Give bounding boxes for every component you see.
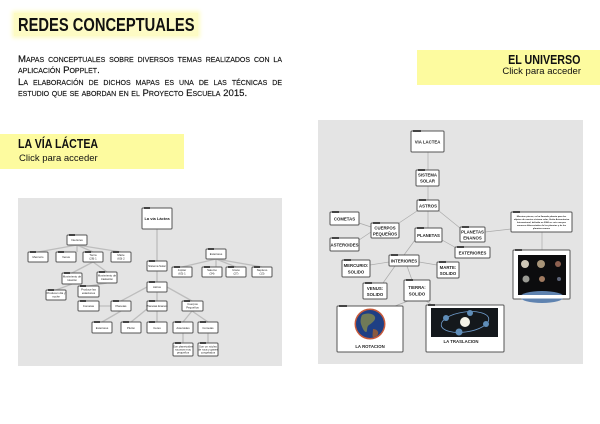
panel: mapa La Vía Láctea: noche	[52, 294, 60, 298]
node: Exteriores	[455, 246, 490, 258]
panel: mapa La Vía Láctea: Son un núcleo	[199, 344, 217, 348]
node: Mercurio	[342, 259, 370, 277]
panel: mapa La Vía Láctea: traslación	[101, 277, 113, 281]
panel: mapa La Vía Láctea: Neptuno	[257, 268, 268, 272]
node: Asteroides	[330, 237, 359, 251]
card: La rotación: LA ROTACION	[355, 344, 385, 349]
banner: La Vía Láctea: LA VÍA LÁCTEA	[18, 137, 98, 151]
node: Sistema Solar: SISTEMA	[418, 172, 437, 178]
panel: mapa La Vía Láctea	[18, 198, 282, 366]
card: planetas enanos imagen	[513, 249, 570, 303]
node: Venus	[363, 282, 387, 299]
node: descripción planetas enanos: planetas enanos	[533, 227, 551, 230]
panel: mapa La Vía Láctea: Son planetoides	[173, 344, 194, 348]
node: Cuerpos pequeños: PEQUEÑOS	[373, 232, 397, 236]
node: Planetas enanos: ENANOS	[463, 236, 482, 240]
node: descripción planetas enanos: objetos de nuestro sistema solar, Unión Astronómica	[514, 218, 570, 221]
panel: mapa El Universo	[318, 120, 583, 364]
intro text: aplicación Popplet.	[18, 64, 100, 76]
node: Marte: SOLIDO	[440, 271, 457, 276]
panel: mapa La Vía Láctea: estaciones	[82, 291, 96, 295]
panel: mapa La Vía Láctea: Venus	[62, 255, 70, 259]
panel: mapa La Vía Láctea: Exteriores	[96, 326, 109, 330]
node: descripción planetas enanos: Internacional, definida en 2006 en seis cuerpos	[517, 221, 567, 224]
panel: mapa La Vía Láctea: Júpiter	[178, 268, 186, 272]
node: Cometas: COMETAS	[334, 216, 355, 222]
panel: mapa La Vía Láctea: Plutón	[127, 326, 135, 330]
node: Exteriores: EXTERIORES	[459, 250, 486, 256]
panel: mapa La Vía Láctea: Interiores	[71, 238, 83, 242]
panel: mapa La Vía Láctea: Producen día y	[47, 291, 66, 295]
card: La traslación	[426, 304, 504, 352]
panel: mapa La Vía Láctea: Ceres	[153, 326, 161, 330]
node: Mercurio: SOLIDO	[348, 270, 365, 274]
node: Vía Láctea: VIA LACTEA	[415, 140, 440, 144]
node: Cuerpos pequeños: CUERPOS	[374, 226, 396, 230]
node: descripción planetas enanos	[511, 211, 572, 232]
node: Sistema Solar: SOLAR	[420, 178, 436, 184]
node: Vía Láctea	[411, 130, 444, 152]
intro text: La elaboración de dichos mapas es una de las técnicas de	[18, 76, 282, 88]
panel: mapa La Vía Láctea: pequeños	[177, 350, 190, 354]
panel: mapa La Vía Láctea: (34)	[210, 272, 215, 276]
node: Tierra: TIERRA:	[408, 285, 426, 290]
panel: mapa La Vía Láctea: Astros	[153, 285, 162, 289]
panel: mapa La Vía Láctea: Pequeños	[186, 306, 199, 310]
panel: mapa La Vía Láctea: (63) 1	[178, 272, 186, 276]
intro text	[18, 54, 282, 98]
panel: mapa La Vía Láctea: Tierra	[89, 253, 97, 257]
node: Tierra	[404, 279, 430, 301]
node: Interiores	[389, 254, 419, 266]
card: La traslación: LA TRASLACION	[444, 339, 478, 344]
node: Asteroides: ASTEROIDES	[331, 242, 359, 248]
panel: mapa La Vía Láctea: congelados	[201, 350, 216, 354]
panel: mapa La Vía Láctea: de roca y gases	[198, 348, 218, 352]
banner: La Vía Láctea: Click para acceder	[19, 153, 98, 164]
panel: mapa La Vía Láctea: rocosos muy	[175, 348, 192, 352]
panel: mapa La Vía Láctea: Movimiento de	[63, 274, 82, 278]
panel: mapa La Vía Láctea: Saturno	[207, 268, 217, 272]
panel: mapa La Vía Láctea: Produce las	[81, 288, 96, 292]
intro text: Mapas conceptuales sobre diversos temas realizados con la	[18, 54, 282, 64]
panel: mapa La Vía Láctea: Marte	[117, 253, 125, 257]
panel: mapa La Vía Láctea: Cuerpos	[187, 302, 198, 306]
node: Astros	[417, 199, 439, 211]
banner: El Universo: EL UNIVERSO	[509, 53, 581, 67]
banner: La Vía Láctea	[0, 134, 184, 169]
panel: mapa La Vía Láctea: Planetas	[116, 304, 127, 308]
node: Interiores: INTERIORES	[391, 258, 417, 264]
panel: mapa La Vía Láctea: La vía Láctea	[144, 216, 170, 221]
panel: mapa La Vía Láctea: Asteroides	[176, 326, 190, 330]
panel: mapa La Vía Láctea: (27)	[234, 272, 239, 276]
node: Planetas	[415, 227, 442, 242]
node: Venus: SOLIDO	[367, 292, 384, 297]
panel: mapa La Vía Láctea: (60) 2	[117, 256, 125, 260]
panel: mapa La Vía Láctea: Cometas	[83, 304, 95, 308]
panel: mapa La Vía Láctea: Cometas	[202, 326, 214, 330]
node: Planetas enanos	[460, 226, 485, 242]
node: Tierra: SOLIDO	[409, 292, 426, 296]
node: Sistema Solar	[416, 169, 439, 186]
node: Marte	[437, 261, 459, 278]
node: Marte: MARTE:	[440, 265, 457, 270]
panel: mapa La Vía Láctea: (13)	[260, 272, 265, 276]
node: descripción planetas enanos: menores diferenciados de los planetas y de los	[517, 224, 567, 227]
title: Redes conceptuales: REDES CONCEPTUALES	[18, 14, 195, 35]
card: La rotación	[337, 305, 403, 352]
panel: mapa La Vía Láctea: Planetas Enanos	[146, 304, 168, 308]
banner: El Universo: Click para acceder	[502, 66, 581, 77]
node: Cometas	[330, 211, 359, 225]
node: Mercurio: MERCURIO:	[344, 263, 369, 268]
banner: El Universo	[417, 50, 600, 85]
node: Cuerpos pequeños	[371, 222, 399, 238]
intro text: estudio que se abordan en el Proyecto Escuela 2015.	[18, 88, 247, 98]
panel: mapa La Vía Láctea: Exteriores	[210, 252, 223, 256]
panel: mapa La Vía Láctea: Urano	[232, 268, 240, 272]
panel: mapa La Vía Láctea: Sistema Solar	[148, 264, 166, 268]
panel: mapa La Vía Láctea: Mercurio	[33, 255, 44, 259]
panel: mapa La Vía Láctea: (28) 1	[89, 256, 97, 260]
panel: mapa La Vía Láctea: rotación	[67, 278, 77, 282]
node: descripción planetas enanos: Mientras piensa, se ha llamado planeta para los	[517, 215, 567, 218]
node: Astros: ASTROS	[419, 204, 437, 208]
node: Venus: VENUS:	[367, 286, 384, 291]
node: Planetas: PLANETAS	[417, 233, 440, 238]
panel: mapa La Vía Láctea: Movimiento de	[98, 274, 117, 278]
node: Planetas enanos: PLANETAS	[461, 230, 484, 234]
